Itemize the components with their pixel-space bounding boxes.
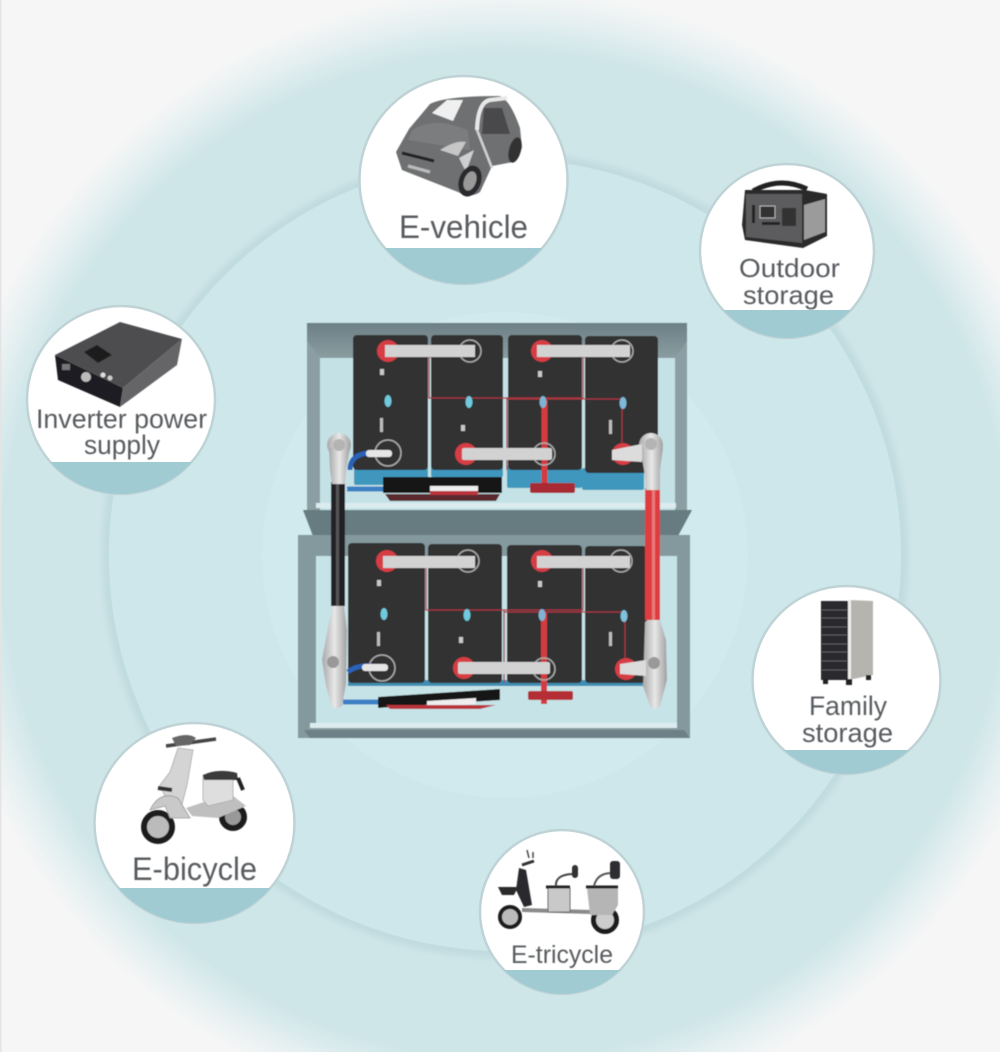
label: E-vehicle: [399, 209, 528, 245]
band: [784, 750, 909, 774]
upper battery pack: [347, 335, 658, 501]
red cable: [612, 433, 667, 709]
upper frame: [303, 323, 692, 536]
icon: car: [396, 96, 524, 200]
label: E-tricycle: [511, 941, 613, 969]
vent dots: [380, 608, 388, 620]
battery assembly: [298, 323, 692, 738]
icon: power station: [742, 183, 827, 248]
BMS module: [383, 477, 502, 493]
panel: Outdoor storage: storage: [743, 280, 834, 310]
black cable: [322, 433, 351, 709]
blue lead: [348, 666, 372, 672]
band: [118, 888, 270, 923]
panel: Inverter power supply: supply: [84, 430, 160, 460]
icon: scooter: [144, 735, 246, 841]
vent dots: [384, 395, 392, 407]
label: Outdoor: [739, 253, 840, 283]
panel: Family storage: storage: [802, 718, 893, 748]
BMS module: [378, 689, 500, 708]
label: Family: [809, 691, 887, 721]
band: [723, 310, 851, 338]
lower battery pack: [343, 543, 647, 709]
busbars: [376, 550, 398, 572]
panel: E-tricycle: [480, 830, 644, 994]
label: E-bicycle: [132, 851, 257, 887]
lower frame: [298, 535, 690, 738]
small marks: [380, 369, 384, 375]
blue lead: [350, 453, 372, 470]
small marks: [377, 580, 381, 586]
wiring: [429, 357, 622, 470]
panel: Inverter power supply: [27, 306, 215, 494]
icon: tricycle: [498, 850, 620, 932]
label: Inverter power: [36, 404, 207, 434]
icon: storage rack: [821, 600, 873, 685]
band: [50, 462, 192, 494]
panel: Outdoor storage: [700, 164, 874, 338]
busbars: [377, 340, 399, 362]
panel: E-bicycle: [94, 723, 294, 923]
wiring: [426, 565, 625, 683]
icon: inverter: [55, 322, 182, 407]
band: [504, 970, 620, 994]
panel: E-vehicle: [360, 76, 568, 284]
panel: Family storage: [752, 586, 940, 774]
band: [385, 248, 542, 284]
